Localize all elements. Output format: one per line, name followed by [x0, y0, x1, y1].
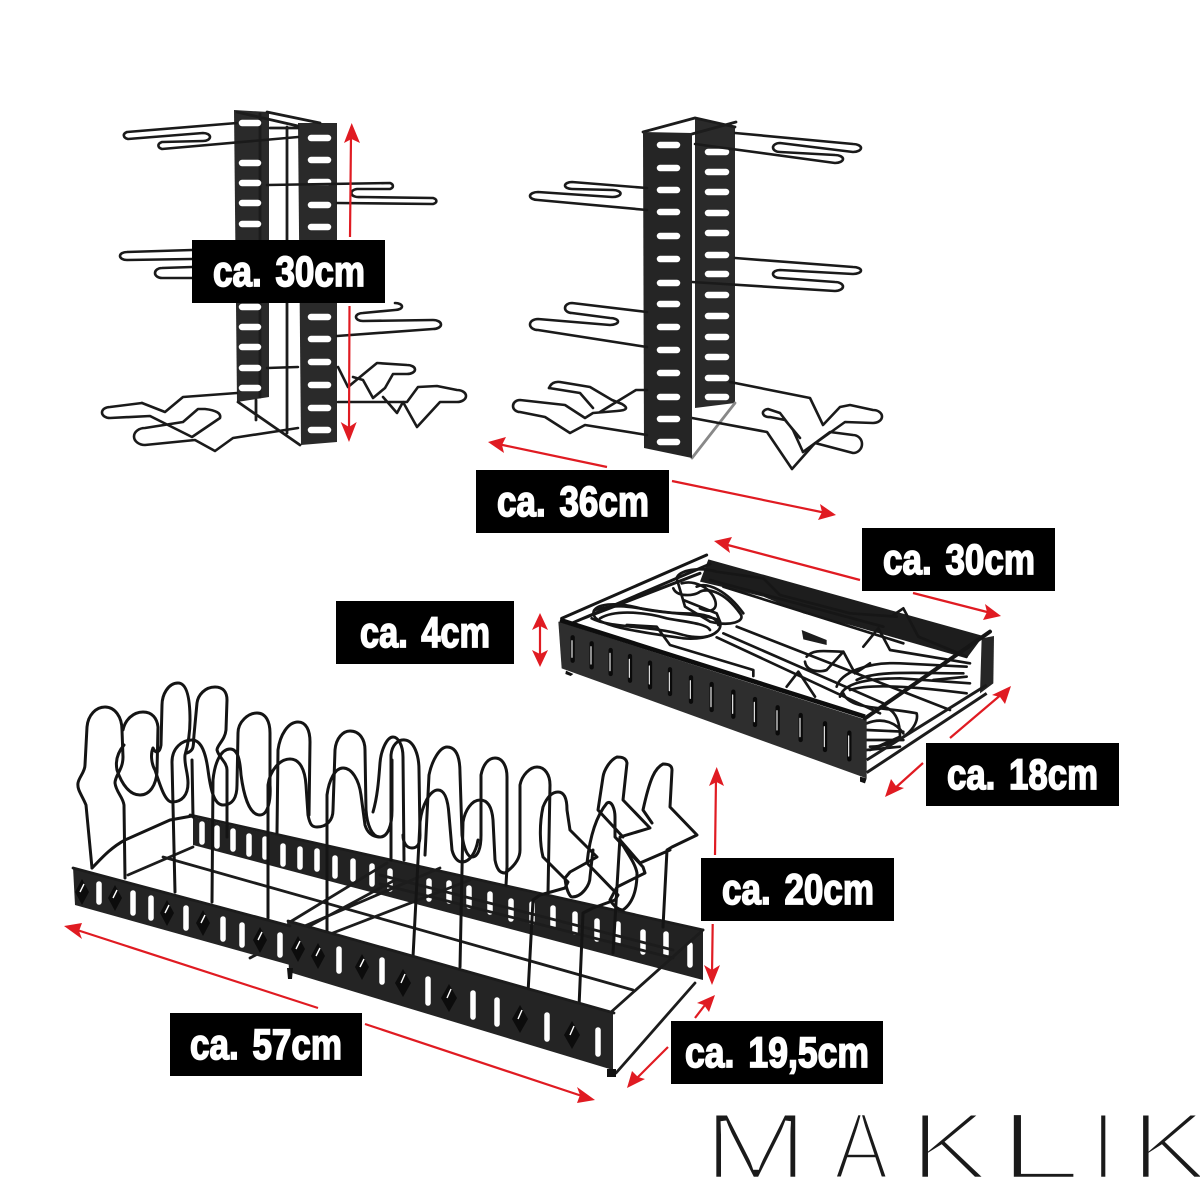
arrow: width of right tall rack [488, 437, 836, 520]
label: ca. 19,5cm [671, 1021, 883, 1084]
label: ca. 30cm length: ca. 30cm [883, 536, 1035, 584]
brand logo: MAKLIK [703, 1092, 1200, 1200]
front rail [73, 867, 616, 1077]
rack 4: extended lid organizer [73, 683, 703, 1077]
rack 2: tall organizer, right view [513, 117, 882, 469]
label: ca. 4cm [336, 601, 514, 664]
rack 3: folded flat organizer [558, 555, 994, 783]
wave dividers [78, 683, 697, 1007]
rear rail [92, 815, 703, 1073]
label: ca. 19,5cm: ca. 19,5cm [685, 1029, 869, 1077]
arrow: height of left tall rack [341, 123, 360, 442]
label: ca. 18cm: ca. 18cm [947, 751, 1098, 799]
label: ca. 20cm [701, 858, 894, 921]
arrow: depth of folded rack [885, 686, 1011, 797]
rack 1: tall organizer, left view [102, 110, 466, 451]
arrow: length of extended rack [64, 923, 595, 1103]
label: ca. 4cm: ca. 4cm [360, 609, 490, 657]
label: ca. 30cm height: ca. 30cm [213, 248, 365, 296]
label: ca. 36cm width: ca. 36cm [497, 478, 649, 526]
brand logo: MAKLIK: I [1091, 1093, 1116, 1200]
brand logo: MAKLIK: M [703, 1092, 809, 1199]
arrow: height of extended rack [704, 767, 724, 985]
brand logo: MAKLIK: K [910, 1092, 989, 1200]
brand logo: MAKLIK: L [998, 1092, 1082, 1200]
label: ca. 57cm: ca. 57cm [190, 1021, 342, 1069]
arrow: length of folded rack [714, 537, 1001, 620]
brand logo: MAKLIK: A [834, 1092, 889, 1199]
arrow: depth of extended rack [627, 995, 715, 1088]
label: ca. 20cm: ca. 20cm [722, 866, 874, 914]
label: ca. 30cm height [192, 240, 385, 303]
label: ca. 36cm width [476, 470, 669, 533]
label: ca. 18cm [926, 743, 1119, 806]
label: ca. 30cm length [862, 528, 1055, 591]
label: ca. 57cm [170, 1013, 362, 1076]
arrow: height of folded rack [532, 613, 548, 667]
